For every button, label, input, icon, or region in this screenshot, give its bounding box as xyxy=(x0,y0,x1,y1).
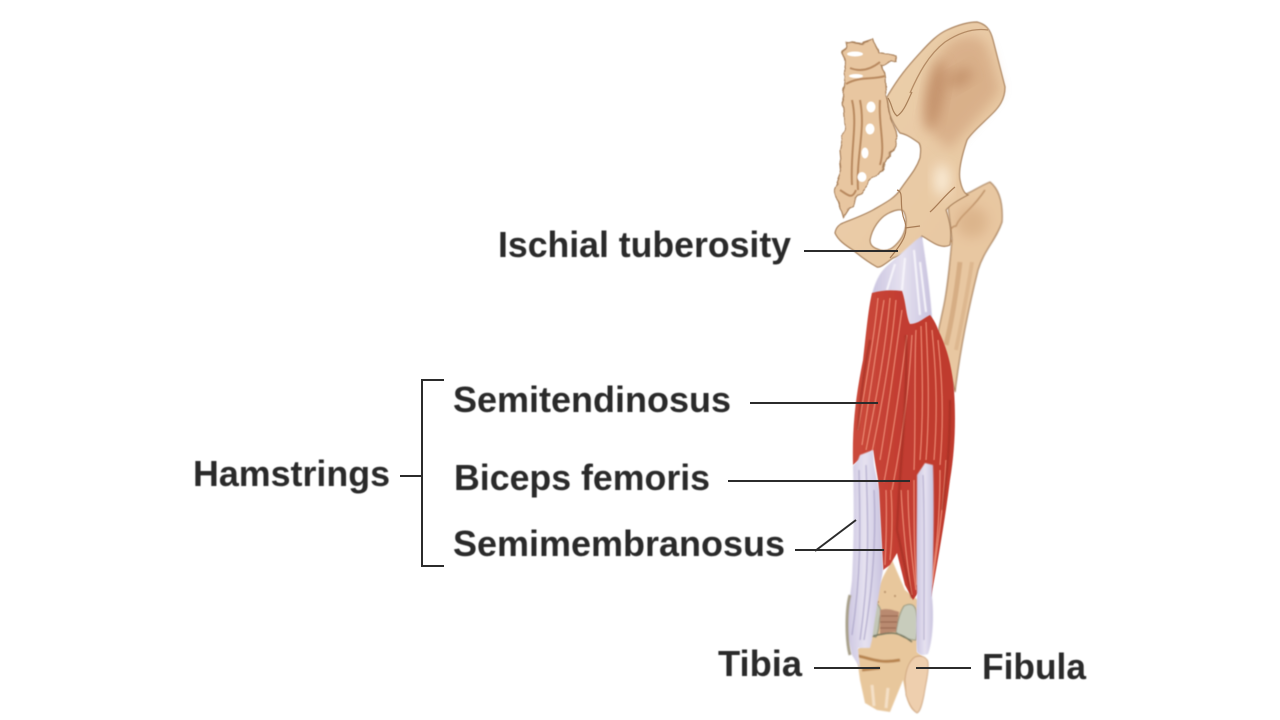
label: Tibia: Tibia xyxy=(718,643,803,684)
icon: lateral and medial tendons xyxy=(847,450,934,668)
muscle fibres xyxy=(858,298,946,595)
icon: knee joint and lower bones xyxy=(856,560,928,713)
icon: hamstring muscle group xyxy=(853,290,955,600)
label: Ischial tuberosity: Ischial tuberosity xyxy=(498,224,791,265)
label: Hamstrings with bracket xyxy=(193,380,444,566)
icon: sacrum bone xyxy=(835,40,898,217)
ilium fossa shading xyxy=(920,36,1000,196)
label: Fibula: Fibula xyxy=(982,646,1087,687)
icon: pelvis hip bone xyxy=(835,22,1005,267)
label: Semimembranosus: Semimembranosus xyxy=(453,523,785,564)
icon: femur shaft xyxy=(938,182,1002,392)
label: Biceps femoris: Biceps femoris xyxy=(454,457,710,498)
label: Semitendinosus: Semitendinosus xyxy=(453,379,731,420)
icon: upper hamstring tendon xyxy=(872,236,932,328)
icon: knee cartilage condyles xyxy=(868,600,918,642)
label: Hamstrings with bracket: Hamstrings xyxy=(193,453,390,494)
